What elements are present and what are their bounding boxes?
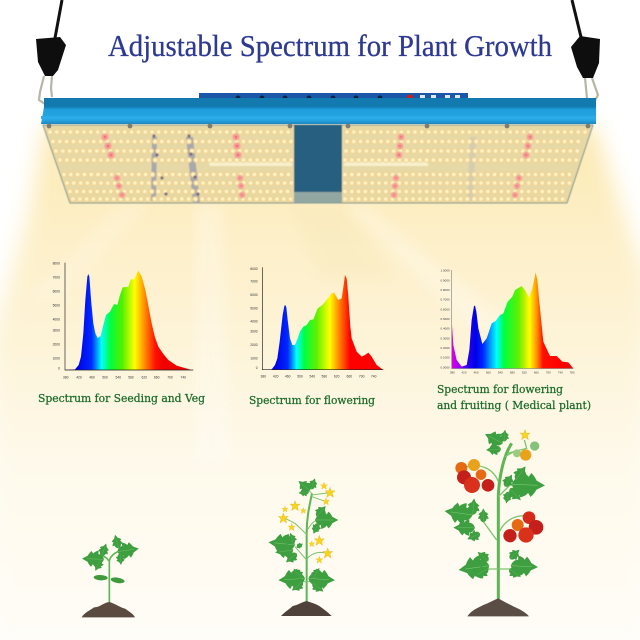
spectrum chart: seeding and veg xyxy=(53,262,193,380)
spectrum chart: flowering: 3000 xyxy=(250,330,258,334)
spectrum chart: flowering and fruiting: 420 xyxy=(462,370,467,374)
spectrum chart: flowering and fruiting: 0.1000 xyxy=(441,356,450,360)
spectrum chart: flowering: 620 xyxy=(334,375,340,379)
spectrum chart: flowering: 7000 xyxy=(250,280,258,284)
spectrum chart: flowering and fruiting: 780 xyxy=(570,370,575,374)
spectrum chart: flowering and fruiting: 0.7000 xyxy=(441,298,450,302)
spectrum chart: flowering and fruiting: 0.8000 xyxy=(441,288,450,292)
spectrum chart: flowering: 2000 xyxy=(250,343,258,347)
spectrum chart: flowering and fruiting: 0.3000 xyxy=(441,336,450,340)
hanger: left rope ratchet xyxy=(36,0,66,104)
label: flowering and fruiting xyxy=(437,383,591,412)
spectrum chart: seeding and veg: 6000 xyxy=(53,289,60,293)
spectrum chart: flowering and fruiting: 540 xyxy=(498,370,503,374)
spectrum chart: seeding and veg: 0 xyxy=(58,367,60,371)
spectrum chart: seeding and veg: 5000 xyxy=(53,303,60,307)
spectrum chart: flowering and fruiting: 500 xyxy=(486,370,491,374)
plant: fruiting tomato xyxy=(443,427,545,616)
spectrum chart: flowering and fruiting: 580 xyxy=(510,370,515,374)
LED rows halo xyxy=(50,132,587,199)
spectrum chart: flowering: 660 xyxy=(347,375,352,379)
spectrum chart: flowering: 0 xyxy=(256,366,258,370)
spectrum chart: seeding and veg: 4000 xyxy=(53,317,60,321)
label: flowering and fruiting: Spectrum for flowering xyxy=(437,383,563,396)
spectrum chart: flowering: 500 xyxy=(297,375,303,379)
spectrum chart: flowering and fruiting: 0.2000 xyxy=(441,346,450,350)
spectrum chart: seeding and veg: 700 xyxy=(167,376,173,380)
aluminium top bar xyxy=(41,98,596,128)
spectrum chart: flowering and fruiting: 0.0000 xyxy=(441,366,450,370)
spectrum chart: flowering: 4000 xyxy=(250,320,258,324)
spectrum chart: flowering: 420 xyxy=(273,375,279,379)
spectrum chart: flowering and fruiting: 460 xyxy=(474,370,479,374)
spectrum chart: seeding and veg: 580 xyxy=(128,376,134,380)
spectrum chart: flowering and fruiting: 620 xyxy=(522,370,527,374)
LED panel board xyxy=(43,125,593,203)
spectrum chart: seeding and veg: 460 xyxy=(89,376,95,380)
spectrum chart: flowering: 5000 xyxy=(250,306,258,310)
title: Adjustable Spectrum for Plant Growth xyxy=(108,28,552,63)
spectrum chart: flowering: 540 xyxy=(310,375,315,379)
spectrum chart: seeding and veg: 2000 xyxy=(53,342,60,346)
label: flowering and fruiting: and fruiting ( Medical plant) xyxy=(437,399,591,412)
spectrum chart: seeding and veg: 7000 xyxy=(53,275,60,279)
spectrum chart: flowering: 1000 xyxy=(250,356,258,360)
spectrum chart: flowering: 580 xyxy=(322,375,327,379)
spectrum chart: seeding and veg: 1000 xyxy=(53,357,60,361)
spectrum chart: flowering and fruiting: 0.6000 xyxy=(441,307,450,311)
plant: seedling xyxy=(82,533,140,617)
spectrum chart: flowering and fruiting: 0.4000 xyxy=(441,327,450,331)
label: seeding and veg: Spectrum for Seeding and Veg xyxy=(38,392,205,405)
spectrum chart: flowering and fruiting: 0.9000 xyxy=(441,278,450,282)
control box xyxy=(199,93,468,102)
spectrum chart: seeding and veg: 8000 xyxy=(53,262,60,266)
plant: flowering xyxy=(267,477,338,616)
spectrum chart: flowering and fruiting xyxy=(441,269,575,374)
spectrum chart: seeding and veg: 3000 xyxy=(53,328,60,332)
spectrum chart: seeding and veg: 660 xyxy=(154,376,160,380)
spectrum chart: seeding and veg: 540 xyxy=(116,376,121,380)
spectrum chart: flowering: 8000 xyxy=(250,267,258,271)
spectrum chart: flowering: 380 xyxy=(261,375,266,379)
spectrum chart: seeding and veg: 500 xyxy=(102,376,108,380)
LED rows core xyxy=(50,132,587,199)
spectrum chart: flowering: 6000 xyxy=(250,293,258,297)
spectrum chart: flowering xyxy=(250,267,383,379)
spectrum chart: flowering and fruiting: 380 xyxy=(450,370,455,374)
label: flowering: Spectrum for flowering xyxy=(249,394,375,407)
spectrum chart: seeding and veg: 380 xyxy=(63,376,69,380)
spectrum chart: flowering and fruiting: 1.0000 xyxy=(441,269,450,273)
hanger: right rope ratchet xyxy=(571,0,600,104)
spectrum chart: seeding and veg: 620 xyxy=(142,376,147,380)
spectrum chart: flowering: 460 xyxy=(285,375,291,379)
spectrum chart: flowering: 700 xyxy=(359,375,365,379)
spectrum chart: flowering and fruiting: 0.5000 xyxy=(441,317,450,321)
spectrum chart: seeding and veg: 420 xyxy=(76,376,82,380)
spectrum chart: flowering and fruiting: 660 xyxy=(534,370,539,374)
red LEDs xyxy=(103,135,532,197)
spectrum chart: flowering: 740 xyxy=(371,375,377,379)
spectrum chart: flowering and fruiting: 740 xyxy=(558,370,563,374)
centre heat sink xyxy=(294,125,342,192)
spectrum chart: seeding and veg: 740 xyxy=(181,376,186,380)
spectrum chart: flowering and fruiting: 700 xyxy=(546,370,551,374)
